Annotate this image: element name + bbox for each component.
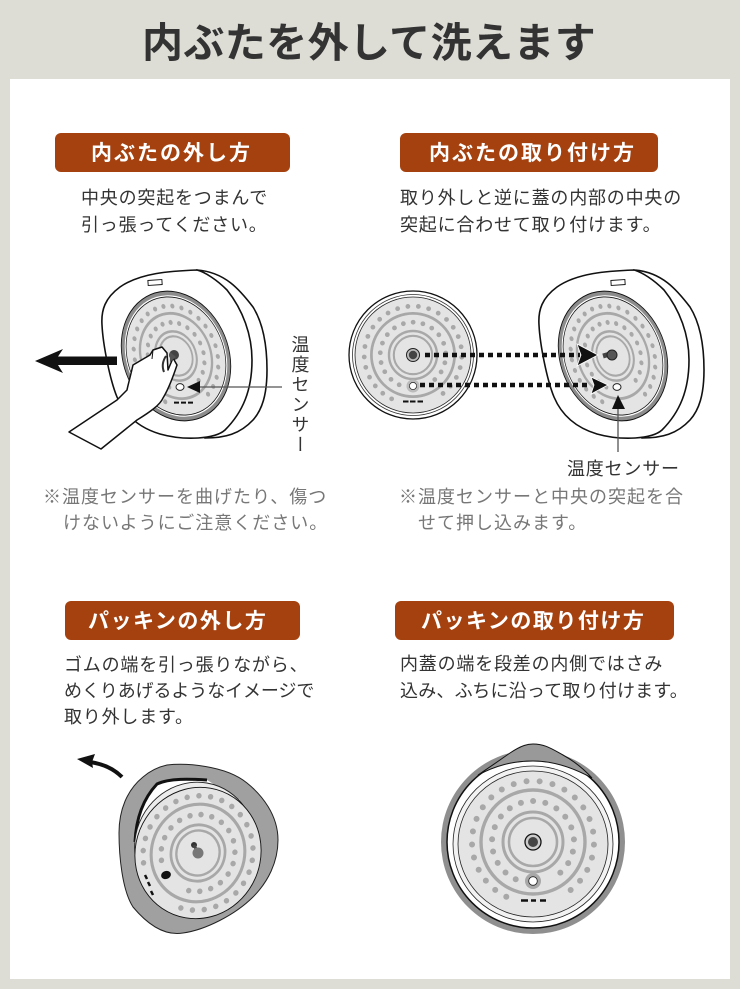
text: pull the center knob: 引っ張ってください。 (81, 215, 268, 235)
note: do not bend the sensor (43, 487, 328, 533)
panel: attaching the gasket (395, 601, 688, 934)
text: attach in reverse order (400, 188, 682, 235)
arrow: temperature sensor pointer (187, 381, 282, 393)
label: temperature sensor vertical: 温度センサー (290, 335, 310, 455)
label: temperature sensor: 温度センサー (567, 459, 680, 479)
text: attach in reverse order: 取り外しと逆に蓋の内部の中央の (400, 188, 682, 208)
text: tuck into the step: 込み、ふちに沿って取り付けます。 (400, 681, 688, 701)
illustration: detached inner lid (349, 291, 477, 419)
illustration: device with lid mount (539, 270, 704, 438)
icon: hand (69, 347, 177, 449)
note: do not bend the sensor: けないようにご注意ください。 (63, 513, 328, 533)
heading: attaching the gasket (395, 601, 674, 640)
heading: removing the gasket: パッキンの外し方 (88, 610, 267, 633)
note: align sensor and knob: ※温度センサーと中央の突起を合 (399, 487, 684, 507)
text: peel the gasket: めくりあげるようなイメージで (64, 681, 314, 701)
text: tuck into the step (400, 654, 688, 701)
text: peel the gasket (64, 655, 314, 727)
panel: attaching the inner lid (349, 133, 704, 533)
text: tuck into the step: 内蓋の端を段差の内側ではさみ (400, 654, 663, 674)
text: attach in reverse order: 突起に合わせて取り付けます。 (400, 215, 661, 235)
heading: attaching the inner lid (400, 133, 658, 172)
illustration: lid on device with hand (69, 270, 267, 449)
arrow: sensor pointer (612, 395, 625, 452)
illustration: gasket peeled from lid (108, 757, 286, 945)
illustration: gasket fitted on lid (441, 744, 625, 934)
text: pull the center knob (81, 188, 268, 235)
panel: removing the inner lid (35, 133, 328, 533)
heading: removing the inner lid (55, 133, 290, 172)
arrow: peel direction (77, 754, 122, 777)
title: 内ぶたを外して洗えます (142, 20, 596, 66)
arrow: pull direction (35, 349, 117, 373)
heading: attaching the inner lid: 内ぶたの取り付け方 (429, 142, 636, 165)
note: do not bend the sensor: ※温度センサーを曲げたり、傷つ (43, 487, 327, 507)
heading: attaching the gasket: パッキンの取り付け方 (421, 610, 645, 633)
note: align sensor and knob (399, 487, 684, 533)
arrow: dotted sensor (420, 377, 608, 394)
arrow: dotted center knob (425, 344, 598, 366)
heading: removing the gasket (65, 601, 300, 640)
text: peel the gasket: ゴムの端を引っ張りながら、 (64, 655, 308, 675)
panel: removing the gasket (64, 601, 314, 945)
heading: removing the inner lid: 内ぶたの外し方 (91, 142, 252, 165)
note: align sensor and knob: せて押し込みます。 (418, 513, 587, 533)
text: pull the center knob: 中央の突起をつまんで (81, 188, 268, 208)
text: peel the gasket: 取り外します。 (64, 707, 194, 727)
